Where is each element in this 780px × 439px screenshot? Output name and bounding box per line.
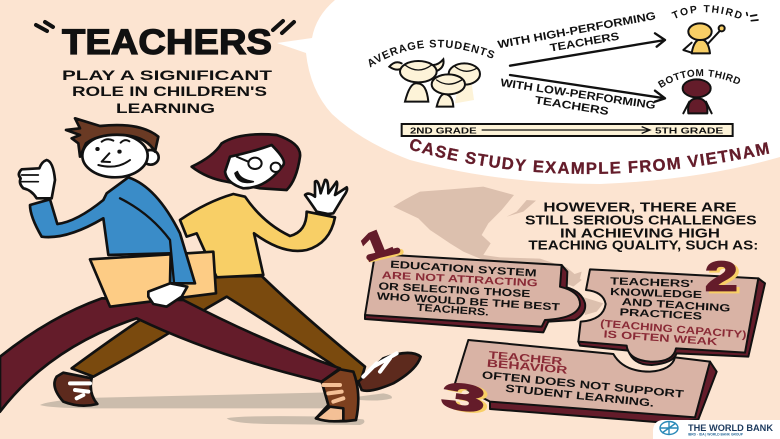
ground shadows (40, 392, 392, 425)
student left (405, 83, 428, 102)
case study panel: AVERAGE STUDENTS (368, 40, 494, 68)
map of Asia (393, 187, 603, 315)
woman glasses (237, 157, 281, 172)
number 2: 2 (705, 253, 738, 300)
grade timeline (402, 124, 733, 136)
number 2: 2 (708, 254, 741, 301)
bottom third label (661, 76, 755, 93)
low performing label (500, 77, 656, 118)
thumbs up finger lines (22, 175, 38, 182)
woman left shoe laces (70, 383, 90, 398)
puzzle piece 1 text: ARE NOT ATTRACTING (382, 270, 538, 289)
number 3: 3 (443, 375, 492, 422)
opening quotes (36, 22, 53, 31)
pigtails (389, 59, 444, 72)
World Bank logo (653, 420, 780, 439)
woman left shoe (54, 373, 97, 406)
grade timeline: 2ND GRADE (410, 125, 477, 135)
challenges section (354, 201, 765, 423)
puzzle piece 2 text: AND TEACHING (621, 297, 731, 315)
sparkle marks (747, 13, 758, 21)
woman mouth (235, 172, 253, 182)
case study panel: CASE STUDY EXAMPLE FROM VIETNAM (410, 139, 770, 174)
high performing label: WITH HIGH-PERFORMING (497, 10, 657, 51)
closing quotes (273, 21, 294, 33)
number 3 (439, 374, 492, 422)
puzzle piece 1 text: OR SELECTING THOSE (378, 281, 531, 300)
challenges heading: STILL SERIOUS CHALLENGES (525, 213, 757, 227)
student right (455, 83, 474, 103)
puzzle piece 1 (365, 254, 585, 332)
teachers illustration (0, 118, 421, 425)
puzzle piece 3 text: TEACHER (488, 349, 563, 368)
puzzle piece 1 text: TEACHERS. (416, 303, 489, 319)
number 1 base (369, 251, 397, 257)
arrow up (510, 33, 665, 66)
subtitle (62, 67, 273, 116)
student front (437, 94, 453, 107)
bottom student icon (683, 79, 712, 113)
man right leg (0, 298, 340, 412)
woman hair (192, 134, 300, 190)
puzzle piece 3 text: BEHAVIOR (486, 358, 568, 377)
case study panel (368, 5, 770, 174)
student fringes (405, 65, 477, 84)
subtitle: PLAY A SIGNIFICANT (62, 67, 273, 83)
number 3: 3 (439, 374, 488, 421)
low performing label: TEACHERS (534, 94, 609, 118)
number 1 (354, 219, 401, 270)
low performing label: WITH LOW-PERFORMING (500, 77, 656, 112)
man features (98, 139, 130, 167)
woman right shoe (358, 353, 421, 391)
globe icon (660, 422, 678, 434)
World Bank logo: IBRD · IDA | WORLD BANK GROUP (688, 432, 744, 436)
woman jumper (180, 194, 335, 277)
number 1 glyph: 1 (354, 219, 398, 270)
man sleeve line (120, 198, 174, 283)
subtitle: LEARNING (116, 100, 215, 116)
puzzle piece 2 text: IS OFTEN WEAK (603, 329, 718, 348)
title word: TEACHERS (62, 23, 272, 62)
man face (82, 134, 148, 177)
puzzle piece 2 (578, 269, 765, 365)
challenges heading: IN ACHIEVING HIGH (560, 226, 720, 240)
woman trousers (72, 276, 365, 383)
man boot toe (316, 407, 343, 421)
grade timeline: 5TH GRADE (655, 125, 724, 135)
puzzle piece 3 (455, 340, 717, 423)
number 2 (705, 253, 741, 301)
students group (389, 59, 480, 107)
puzzle piece 3 text: STUDENT LEARNING. (505, 383, 655, 410)
man thumbs up hand (19, 160, 55, 198)
puzzle piece 3 text (481, 349, 685, 410)
case study caption (408, 149, 770, 174)
man ear (143, 150, 159, 165)
man jumper (30, 177, 195, 283)
puzzle piece 1 text: WHO WOULD BE THE BEST (376, 291, 561, 314)
title (36, 21, 294, 62)
subtitle: ROLE IN CHILDREN'S (72, 83, 267, 99)
folder (90, 252, 216, 307)
challenges heading (525, 201, 758, 252)
top student icon (683, 23, 725, 53)
puzzle piece 2 text (600, 276, 747, 348)
puzzle piece 2 text: KNOWLEDGE (610, 287, 702, 301)
top third label (674, 12, 750, 23)
number 1 base shadow (371, 252, 401, 259)
woman face (225, 145, 284, 188)
man eyes (97, 149, 120, 152)
puzzle piece 3 text: OFTEN DOES NOT SUPPORT (481, 369, 685, 401)
man folder hand (148, 283, 187, 307)
World Bank logo: THE WORLD BANK (688, 423, 774, 433)
man boot laces (323, 385, 343, 402)
puzzle piece 1 text (376, 260, 561, 319)
puzzle piece 2 text: (TEACHING CAPACITY) (600, 319, 747, 341)
woman hand (305, 180, 347, 214)
case study panel: TOP THIRD (671, 5, 742, 18)
man hair (66, 118, 158, 157)
challenges heading: TEACHING QUALITY, SUCH AS: (528, 238, 758, 252)
puzzle piece 2 text: PRACTICES (619, 307, 702, 323)
case study panel: BOTTOM THIRD (658, 69, 740, 88)
puzzle piece 2 text: TEACHERS' (610, 276, 694, 290)
woman right shoe laces (363, 353, 397, 377)
challenges heading: HOWEVER, THERE ARE (543, 201, 737, 215)
puzzle piece 1 text: EDUCATION SYSTEM (390, 260, 537, 280)
man boot (316, 369, 358, 421)
arrow down (510, 75, 665, 102)
average students label (370, 47, 507, 68)
speech bubble panel (277, 0, 780, 184)
high performing label: TEACHERS (549, 31, 620, 55)
